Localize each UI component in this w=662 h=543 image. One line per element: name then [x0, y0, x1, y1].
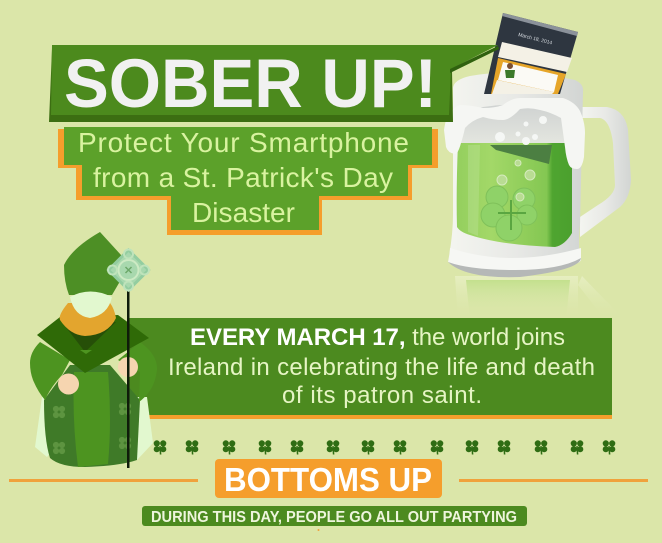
title text: SOBER UP!	[64, 45, 437, 122]
info text: Ireland in celebrating the life and death	[168, 354, 595, 381]
mitre	[64, 232, 121, 295]
right hand	[118, 357, 138, 377]
subtitle text: from a St. Patrick's Day	[93, 162, 393, 193]
info text: of its patron saint.	[282, 382, 482, 409]
section heading: bottoms up: BOTTOMS UP	[224, 461, 432, 498]
robe centre stripe	[74, 372, 110, 467]
celtic cross	[108, 250, 149, 290]
subtitle text: Protect Your Smartphone	[78, 127, 409, 158]
staff	[127, 285, 130, 468]
face	[70, 292, 112, 318]
foam bubbles	[495, 116, 547, 145]
phone in mug: March 18, 2014	[518, 32, 553, 46]
clover divider row	[154, 440, 615, 454]
mug base	[449, 248, 581, 274]
highlight stripe	[468, 145, 480, 236]
green beer	[457, 143, 572, 247]
bubbles	[497, 160, 535, 201]
beer mug reflection	[455, 276, 625, 320]
shamrock in beer	[481, 186, 537, 241]
info text: EVERY MARCH 17, the world joins	[190, 324, 565, 351]
title banner	[49, 45, 499, 122]
submerged phone	[490, 145, 552, 164]
subtitle text: Disaster	[192, 197, 295, 228]
phone in mug	[484, 13, 578, 94]
collar	[60, 303, 116, 336]
robe	[44, 365, 140, 467]
robe clovers	[53, 403, 131, 454]
mantle	[37, 315, 149, 373]
info text	[168, 324, 595, 409]
pale under-robe	[35, 397, 153, 460]
mug handle	[580, 107, 631, 237]
Saint Patrick figure	[30, 232, 157, 468]
foam	[444, 98, 585, 169]
subtitle ribbon	[58, 127, 438, 235]
info panel	[127, 318, 612, 419]
mug interior	[458, 104, 572, 150]
subtitle text	[78, 127, 409, 228]
left hand	[58, 374, 79, 394]
mug body	[448, 73, 583, 272]
arms	[30, 342, 70, 400]
beer mug	[444, 13, 631, 277]
sub-heading bar: DURING THIS DAY, PEOPLE GO ALL OUT PARTYING	[151, 509, 517, 526]
